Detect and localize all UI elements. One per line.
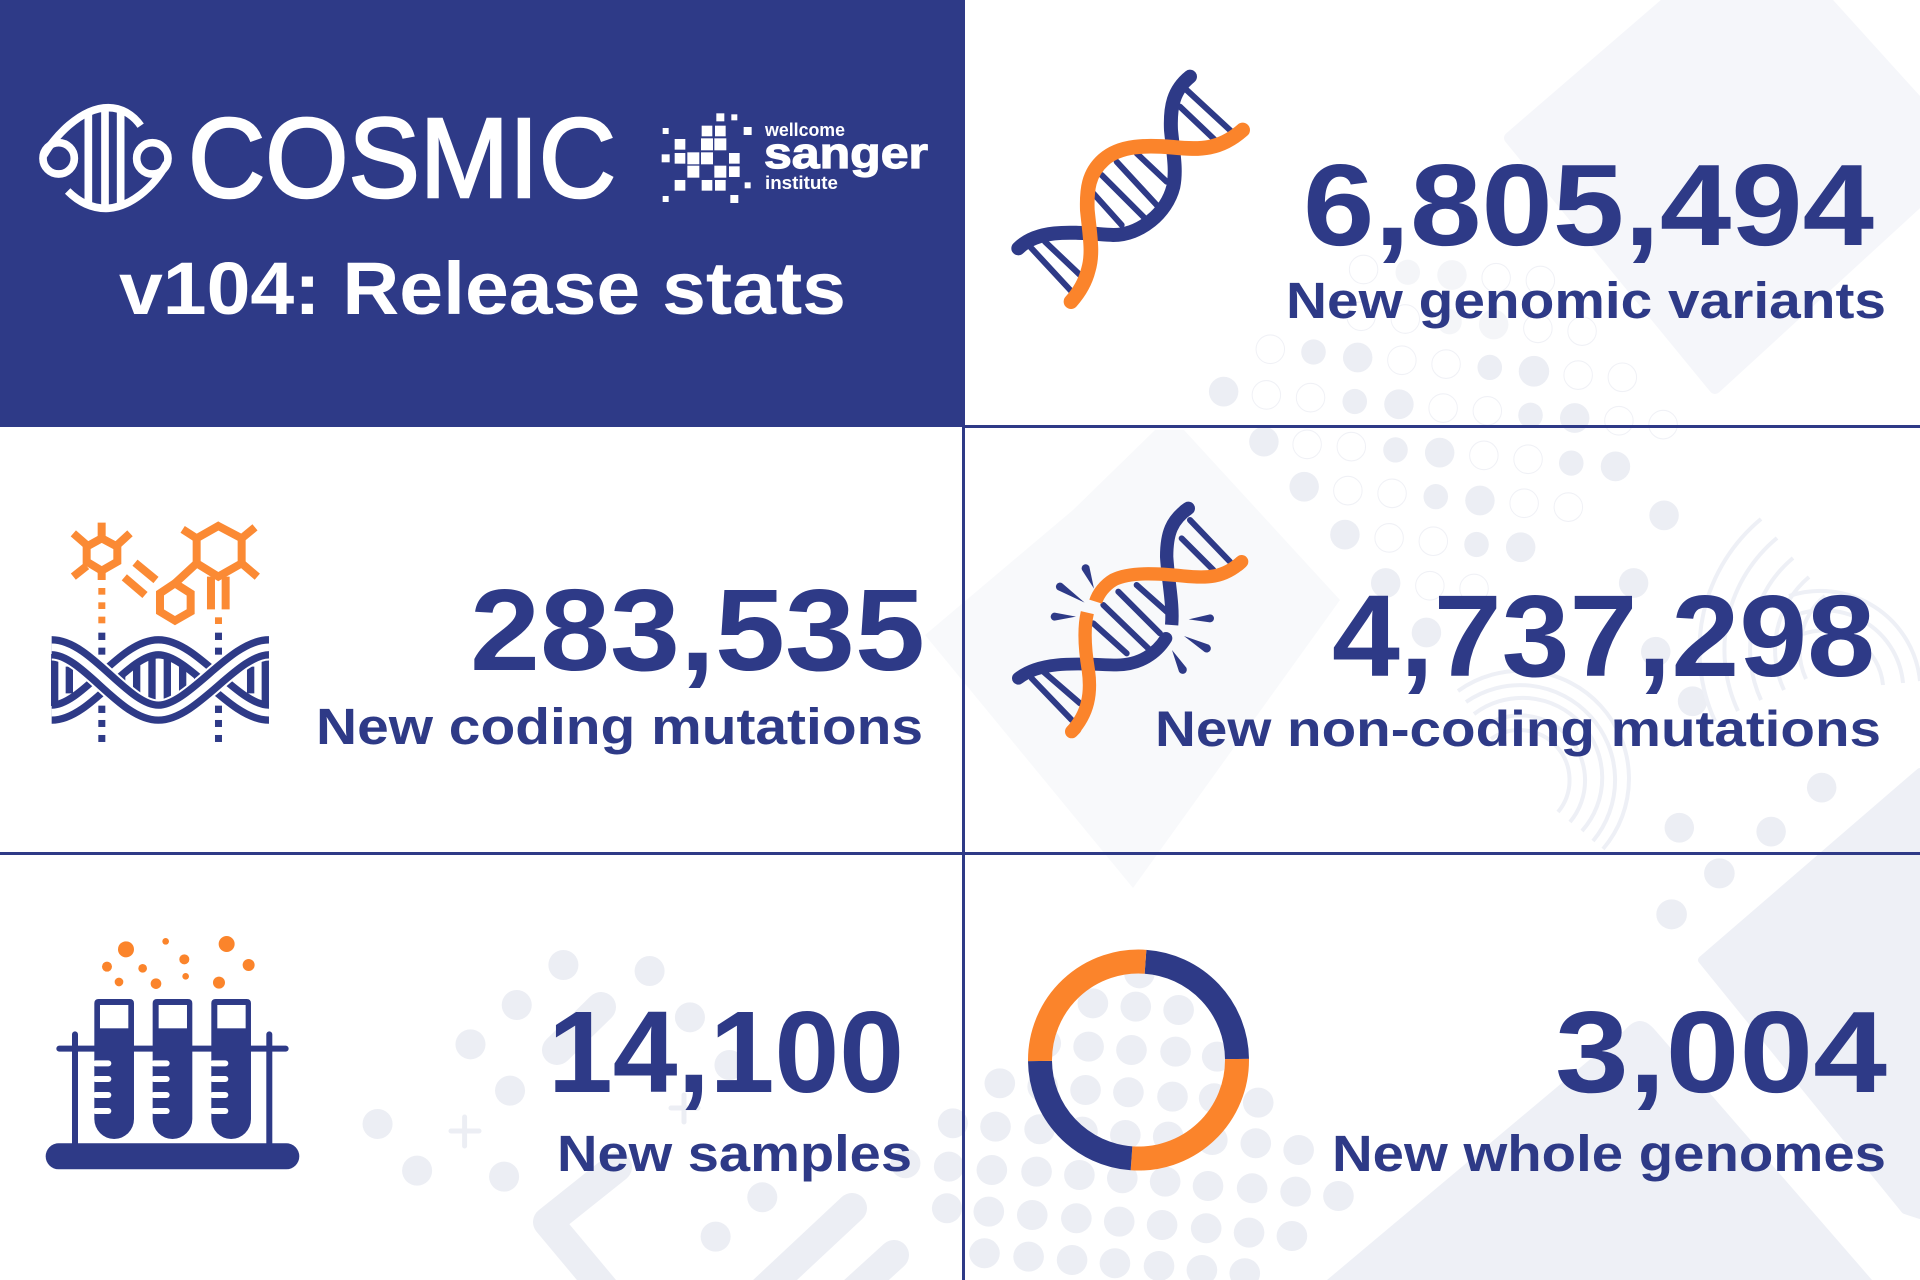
label: New non-coding mutations [1155,701,1881,757]
number: 14,100 [548,987,904,1117]
panel: new coding mutations [52,523,925,755]
icon: broken DNA helix [1018,508,1242,732]
icon: DNA helix [1018,77,1243,302]
panel: new genomic variants [1018,77,1886,329]
icon: Sanger logo mark [662,113,752,203]
number: 6,805,494 [1303,140,1874,270]
number: 283,535 [470,565,925,695]
icon: donut ring [1040,962,1237,1159]
label: New genomic variants [1286,272,1886,329]
Wellcome Sanger Institute wordmark: wellcome [764,120,845,140]
icon: COSMIC logo mark [43,108,168,208]
COSMIC wordmark: COSMIC [188,95,616,221]
icon: test tubes [46,936,299,1169]
panel: header [0,0,965,427]
panel: new non-coding mutations [1018,508,1881,757]
icon: molecules and DNA [52,523,269,742]
label: New coding mutations [316,698,923,755]
Wellcome Sanger Institute wordmark: sanger [764,129,928,178]
number: 3,004 [1555,987,1887,1117]
panel: new whole genomes [1040,962,1887,1182]
number: 4,737,298 [1332,571,1875,701]
panel: new samples [46,936,912,1182]
title: v104: Release stats [119,247,846,330]
Wellcome Sanger Institute wordmark: institute [765,173,838,193]
label: New samples [557,1125,912,1182]
label: New whole genomes [1332,1125,1886,1182]
Wellcome Sanger Institute wordmark [764,120,928,193]
